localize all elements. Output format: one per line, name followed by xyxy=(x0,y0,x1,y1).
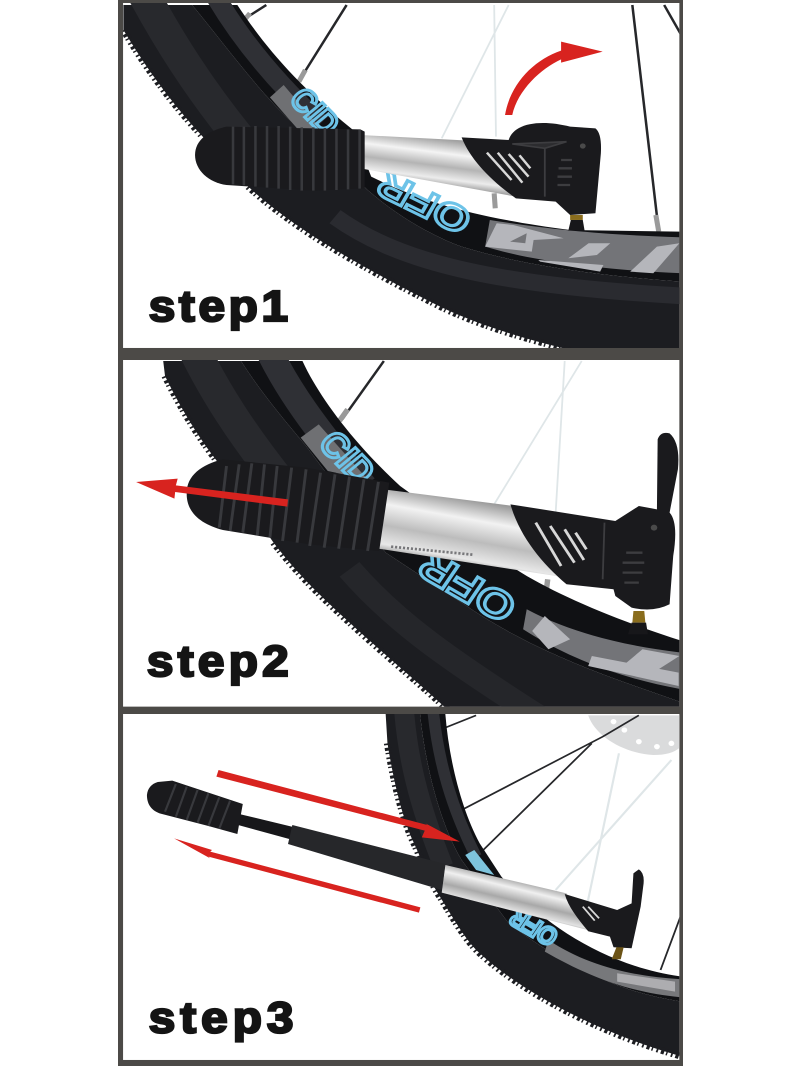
panel: step 3 xyxy=(123,707,682,1060)
panel: step 2 xyxy=(123,353,682,716)
spokes xyxy=(444,715,680,970)
rim: CID xyxy=(282,81,347,142)
arrow: pull xyxy=(174,838,420,913)
pump xyxy=(147,781,644,959)
tire xyxy=(123,0,697,350)
arrow xyxy=(136,479,288,507)
rim: OFR xyxy=(370,163,479,242)
rim xyxy=(241,353,682,703)
rod xyxy=(238,814,292,839)
tire xyxy=(163,353,682,716)
rim: OFR xyxy=(504,903,563,952)
arrow: push xyxy=(216,770,460,842)
rim decal xyxy=(270,85,321,128)
valve xyxy=(631,611,648,630)
label: step3 xyxy=(149,992,293,1042)
rim xyxy=(192,0,682,282)
spokes xyxy=(339,361,582,597)
outer frame xyxy=(118,0,683,1066)
label: step1 xyxy=(149,281,288,331)
silver barrel xyxy=(378,489,567,578)
foam grip xyxy=(187,459,389,551)
tire xyxy=(386,707,682,1057)
label: step2 xyxy=(147,636,289,686)
spokes xyxy=(243,5,682,232)
panel: step 1 xyxy=(123,0,697,350)
pump xyxy=(187,433,678,634)
rim decal xyxy=(301,424,368,479)
rim: CID xyxy=(311,423,384,492)
silver barrel xyxy=(360,135,516,197)
arrow xyxy=(505,42,603,115)
foam grip xyxy=(195,126,365,191)
silver barrel xyxy=(442,865,590,931)
valve xyxy=(568,215,585,231)
rim decal xyxy=(465,850,494,875)
brake disc xyxy=(588,715,682,755)
valve xyxy=(612,947,624,959)
dark barrel xyxy=(288,825,445,890)
foam grip xyxy=(147,781,243,834)
pump head xyxy=(565,869,644,948)
pump xyxy=(195,123,601,231)
rim xyxy=(420,707,682,1002)
pump head xyxy=(462,123,601,215)
pump head xyxy=(510,433,678,610)
rim: OFR xyxy=(410,542,524,632)
